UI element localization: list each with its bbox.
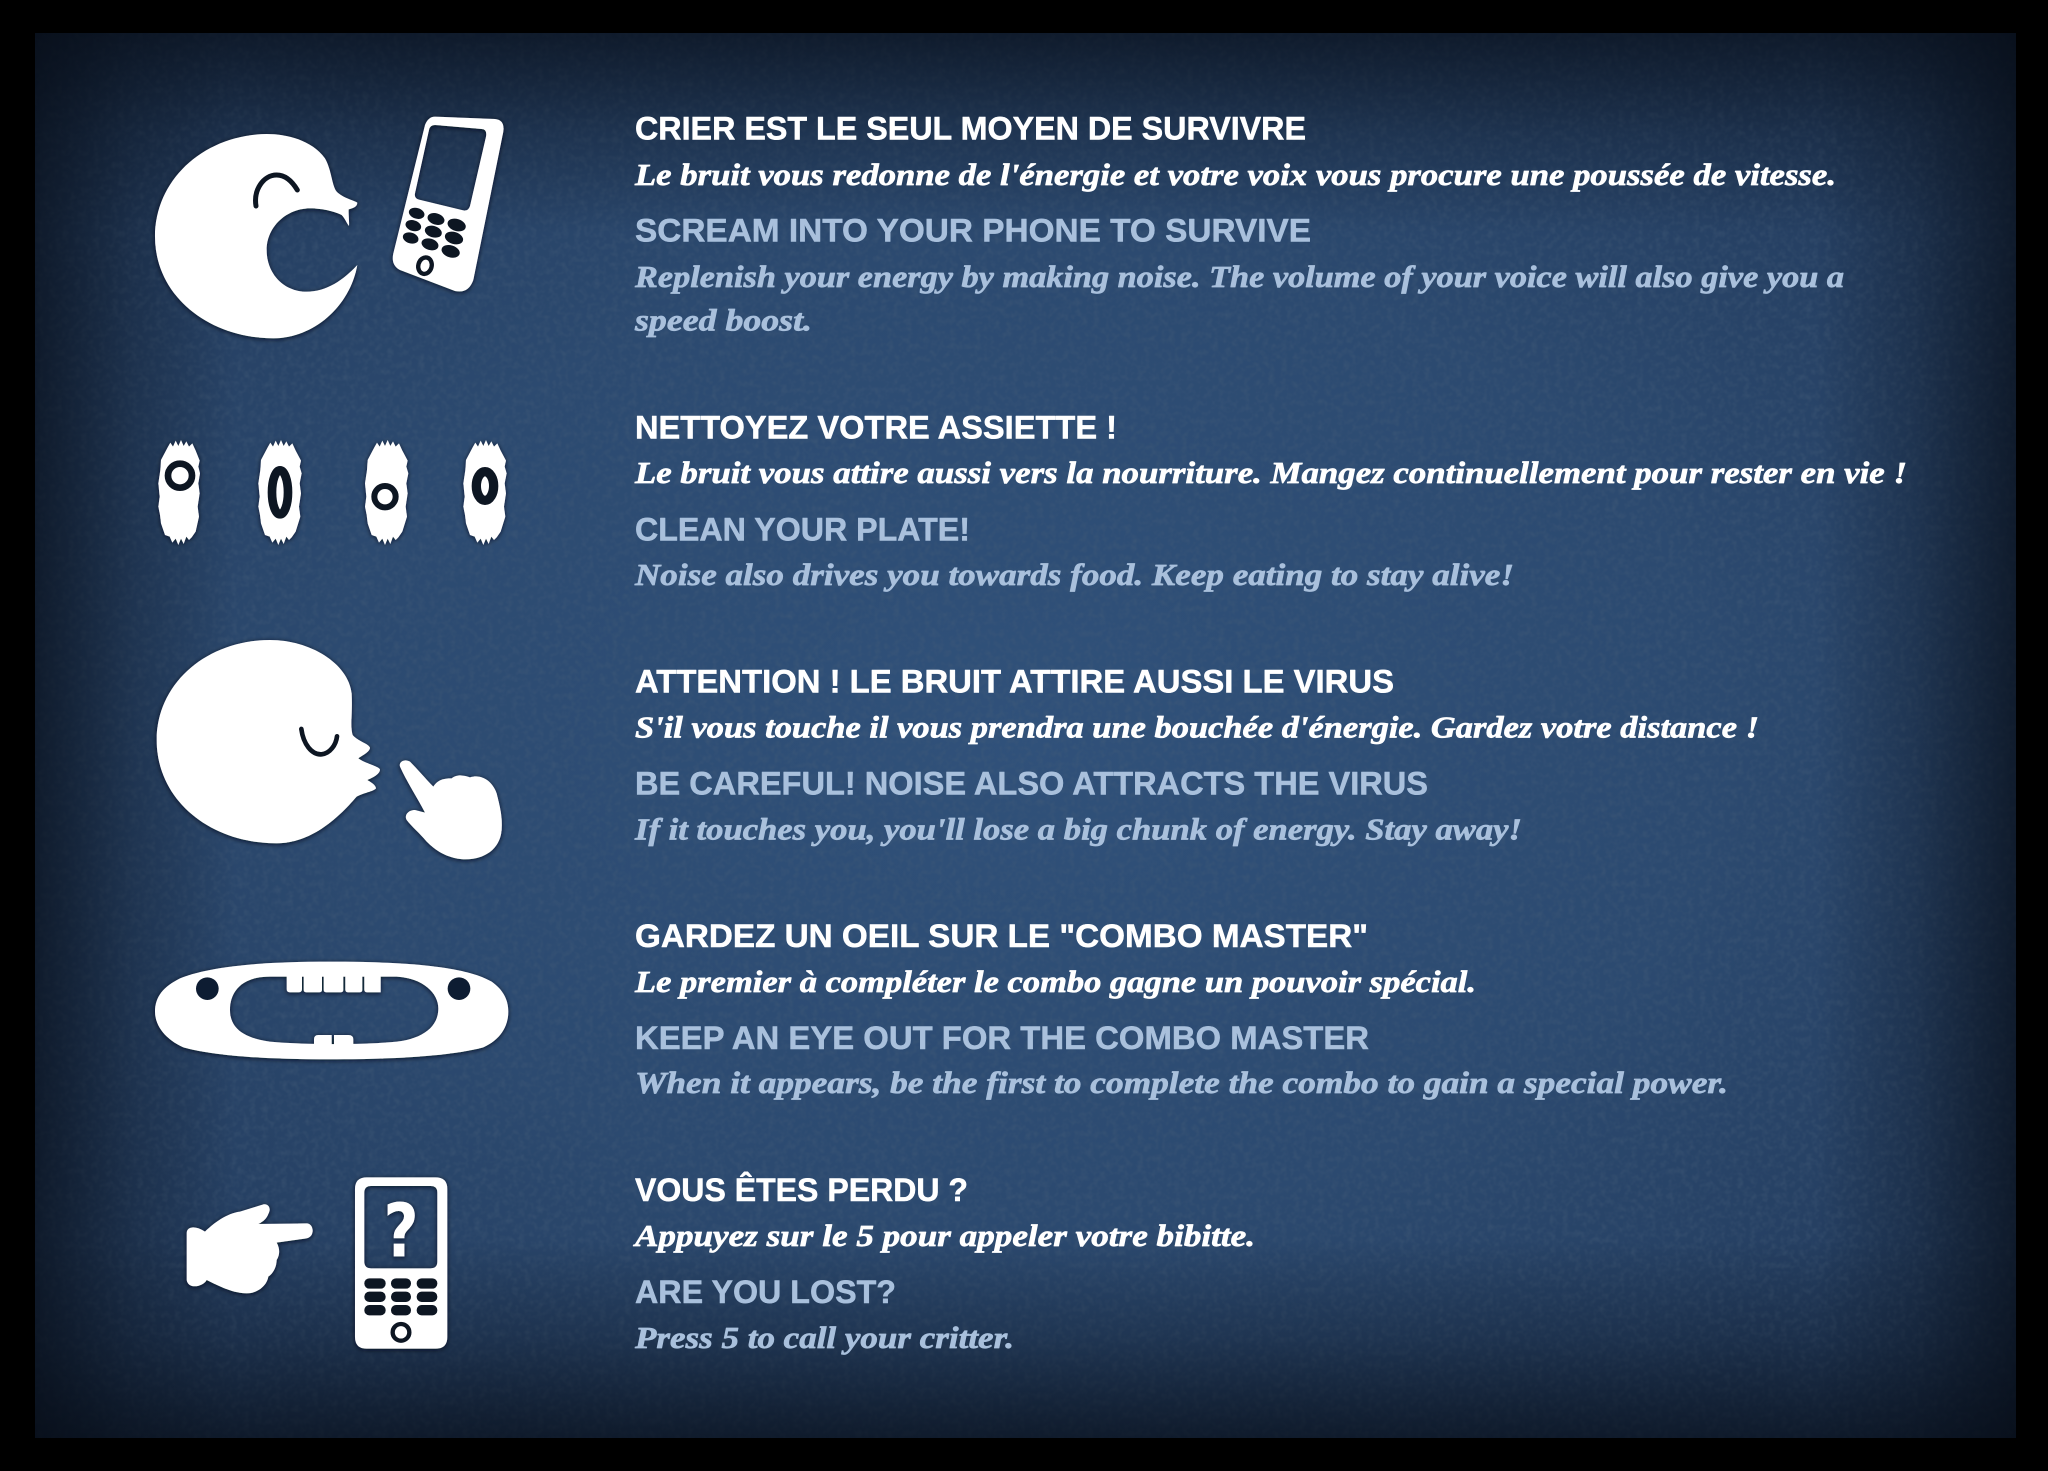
heading en: KEEP AN EYE OUT FOR THE COMBO MASTER (635, 1020, 1369, 1056)
body en line 1: Replenish your energy by making noise. The volume of your voice will also give you a (634, 259, 1844, 294)
heading en: ARE YOU LOST? (635, 1274, 896, 1310)
body en line 2: speed boost. (634, 302, 812, 338)
body en: When it appears, be the first to complete the combo to gain a special power. (635, 1065, 1728, 1100)
icon: four furry food pellets (158, 440, 507, 545)
text block: are you lost (633, 1172, 1255, 1355)
heading en: SCREAM INTO YOUR PHONE TO SURVIVE (635, 212, 1311, 248)
body fr: Appuyez sur le 5 pour appeler votre bibitte. (633, 1218, 1255, 1253)
heading en: CLEAN YOUR PLATE! (635, 512, 970, 548)
body fr: Le premier à compléter le combo gagne un pouvoir spécial. (634, 964, 1476, 999)
question mark: ? (383, 1189, 419, 1275)
creature with open mouth (155, 134, 357, 338)
text block: virus warning (634, 664, 1759, 846)
pointing hand (400, 760, 502, 859)
text block: scream (634, 110, 1844, 338)
pellet 3 (365, 440, 408, 545)
icon: screaming creature and tilted phone (155, 117, 504, 338)
heading fr: CRIER EST LE SEUL MOYEN DE SURVIVRE (635, 110, 1306, 146)
phone with keypad (355, 1177, 447, 1349)
heading fr: VOUS ÊTES PERDU ? (635, 1172, 968, 1208)
body fr: Le bruit vous attire aussi vers la nourriture. Mangez continuellement pour rester en vie ! (634, 455, 1907, 490)
heading fr: ATTENTION ! LE BRUIT ATTIRE AUSSI LE VIRUS (635, 664, 1394, 700)
body en: If it touches you, you'll lose a big chunk of energy. Stay away! (634, 812, 1522, 846)
tilted phone (393, 117, 504, 292)
body en: Noise also drives you towards food. Keep eating to stay alive! (634, 557, 1514, 592)
heading fr: GARDEZ UN OEIL SUR LE "COMBO MASTER" (635, 918, 1368, 954)
heading en: BE CAREFUL! NOISE ALSO ATTRACTS THE VIRUS (635, 766, 1428, 802)
icon: combo master face (155, 962, 508, 1059)
icon: hand pointing at phone with question mark (187, 1177, 447, 1349)
pellet 4 (463, 440, 507, 545)
body fr: S'il vous touche il vous prendra une bouchée d'énergie. Gardez votre distance ! (635, 710, 1759, 744)
pointing hand (187, 1204, 313, 1293)
pellet 1 (158, 440, 200, 545)
text block: combo master (634, 918, 1728, 1100)
heading fr: NETTOYEZ VOTRE ASSIETTE ! (635, 410, 1117, 446)
pellet 2 (258, 440, 302, 545)
icon: shushing creature and pointing hand (157, 640, 502, 859)
body en: Press 5 to call your critter. (634, 1320, 1014, 1355)
creature in profile (157, 640, 380, 843)
body fr: Le bruit vous redonne de l'énergie et votre voix vous procure une poussée de vitesse. (634, 157, 1836, 192)
text block: clean your plate (634, 410, 1907, 592)
